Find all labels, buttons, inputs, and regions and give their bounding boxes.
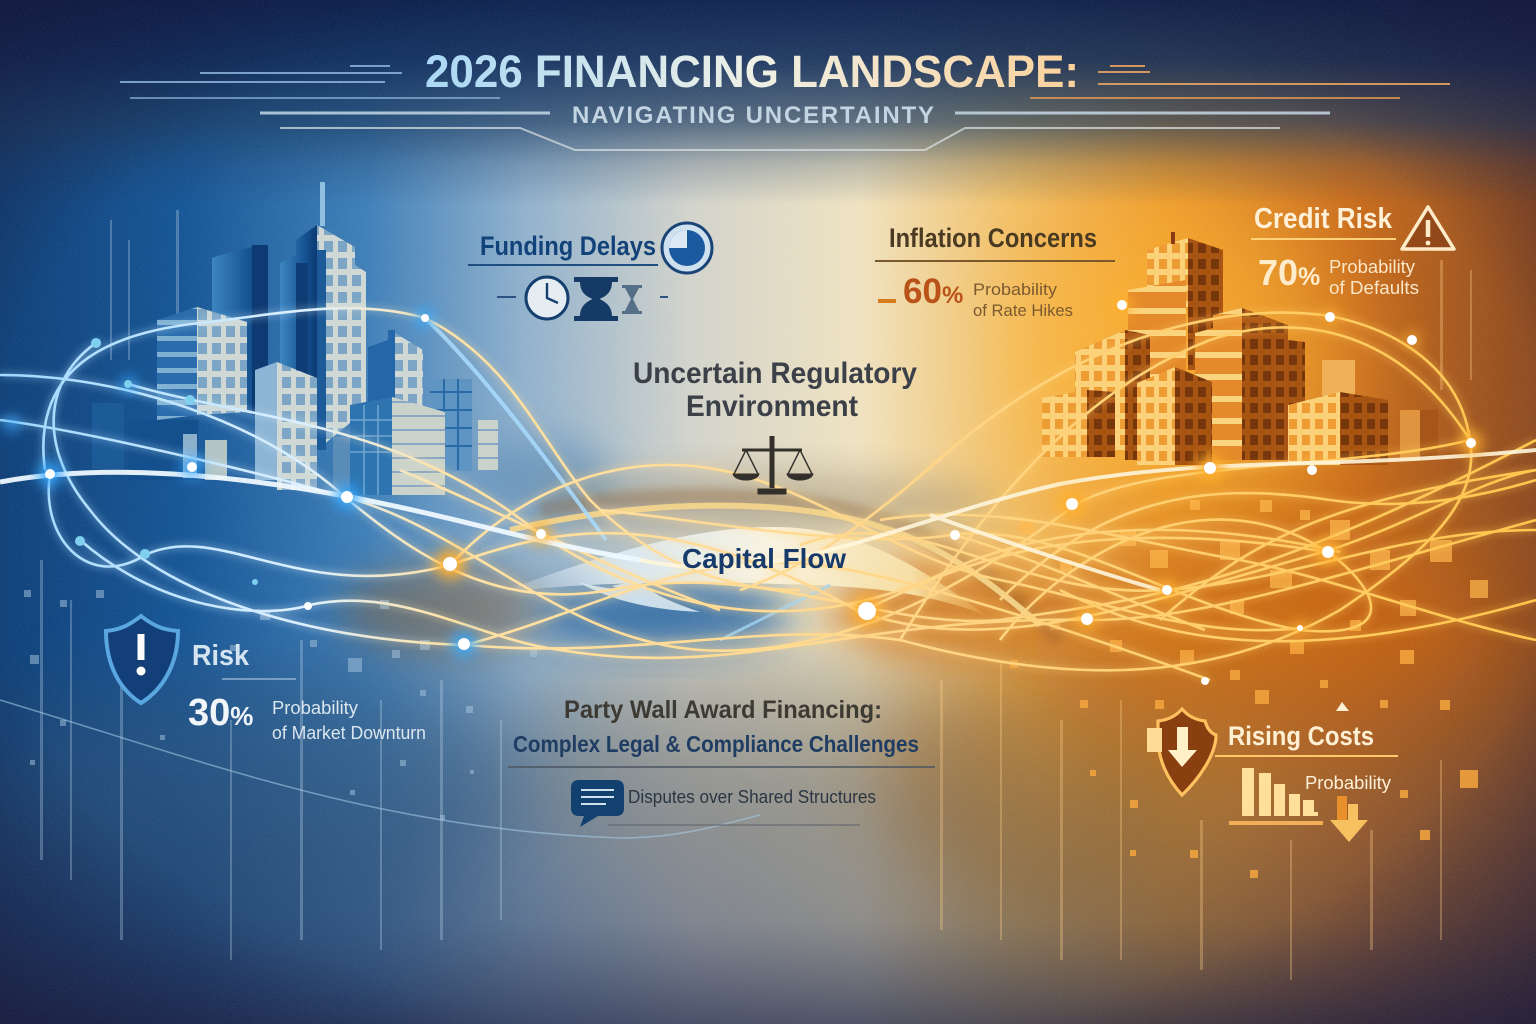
central tower (280, 225, 317, 450)
ribbon arrow (578, 580, 700, 612)
icon: speech bubble (571, 780, 624, 827)
inflation concerns: Inflation Concerns (889, 223, 1097, 253)
icon: down arrow (1330, 796, 1368, 842)
rising costs: Probability (1305, 773, 1391, 793)
rising costs: Rising Costs (1228, 721, 1374, 751)
pixel squares (24, 500, 1488, 878)
lower right block (1288, 392, 1340, 465)
big front block (350, 397, 392, 495)
front low left (1042, 390, 1087, 457)
party wall award financing (508, 696, 935, 827)
title: 2026 FINANCING LANDSCAPE: (425, 46, 1079, 97)
rising costs (1147, 702, 1398, 842)
small front block (255, 362, 277, 480)
data pixel bars (40, 210, 1472, 980)
blue window tower (430, 379, 472, 471)
big block (1195, 308, 1242, 460)
party wall award financing: Complex Legal & Compliance Challenges (513, 731, 919, 757)
risk callout: of Market Downturn (272, 723, 426, 743)
capital flow label: Capital Flow (682, 543, 846, 574)
risk callout (106, 616, 426, 743)
top tower (1147, 238, 1188, 310)
funding delays: Funding Delays (480, 231, 656, 261)
inflation concerns: Probability (973, 280, 1058, 299)
risk callout: Probability (272, 698, 358, 718)
icon: shield with down arrow (1147, 709, 1216, 795)
right city skyline (1042, 232, 1438, 465)
party wall award financing: Disputes over Shared Structures (628, 787, 876, 807)
mid-left tower (1075, 330, 1125, 450)
inflation concerns: 60% (903, 272, 963, 311)
funding delays (468, 223, 712, 321)
icon: hourglass (574, 277, 618, 321)
title: NAVIGATING UNCERTAINTY (572, 102, 934, 129)
icon: dial clock (662, 223, 712, 273)
risk callout: Risk (192, 640, 250, 672)
glowing nodes (5, 295, 1482, 685)
banded tower (1128, 280, 1186, 400)
capital flow lines (0, 308, 1536, 838)
party wall award financing: Party Wall Award Financing: (564, 696, 882, 724)
right medium tower (368, 330, 395, 470)
icon: clock (526, 277, 568, 319)
inflation concerns: of Rate Hikes (973, 301, 1073, 320)
title (120, 46, 1450, 150)
inflation concerns (875, 223, 1115, 320)
credit risk (1251, 203, 1454, 298)
back tower (212, 245, 268, 410)
left block (157, 307, 197, 420)
title decorative lines (120, 66, 1450, 150)
icon: small hourglass (622, 285, 642, 314)
icon: scales of justice (733, 436, 813, 494)
credit risk: Credit Risk (1254, 203, 1393, 235)
credit risk: 70% (1258, 252, 1320, 293)
left city skyline (92, 182, 498, 495)
uncertain regulatory environment (633, 357, 917, 494)
uncertain regulatory environment: Uncertain Regulatory (633, 357, 917, 390)
bar chart (1242, 768, 1318, 816)
risk callout: 30% (188, 692, 253, 734)
credit risk: Probability (1329, 257, 1415, 277)
uncertain regulatory environment: Environment (686, 390, 858, 423)
capital flow ribbon (500, 527, 985, 615)
icon: warning triangle (1402, 207, 1454, 249)
credit risk: of Defaults (1329, 278, 1419, 298)
front center (1137, 367, 1175, 465)
icon: shield (106, 616, 178, 703)
